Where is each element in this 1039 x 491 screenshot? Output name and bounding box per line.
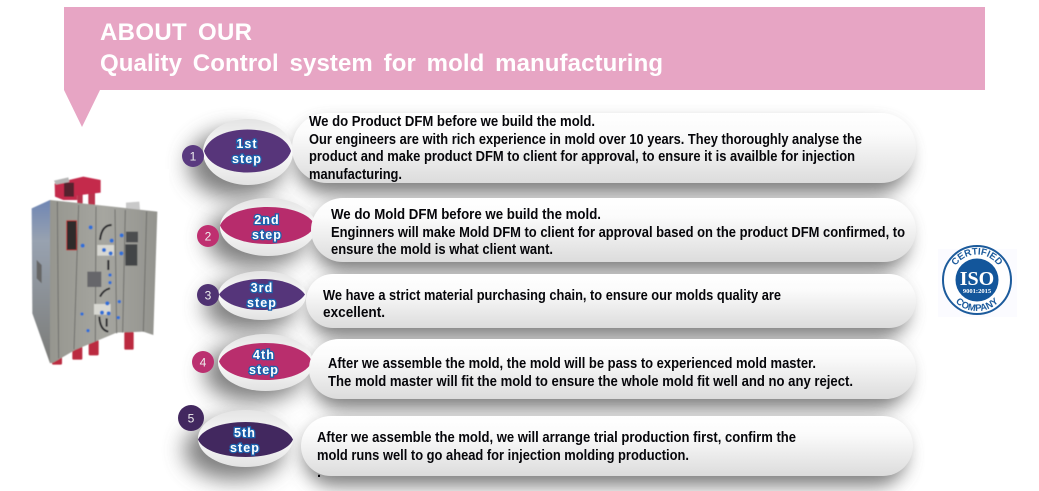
photo background xyxy=(0,169,169,369)
step label 5: 5th xyxy=(234,426,256,440)
number badge 2: 2 xyxy=(205,230,212,244)
title line 1: ABOUT OUR xyxy=(100,19,252,46)
text 4: After we assemble the mold, the mold will be pass to experienced mold master. xyxy=(328,356,816,372)
oval 1 xyxy=(204,129,291,173)
oval 2 xyxy=(220,207,315,244)
number badge 1: 1 xyxy=(190,150,197,164)
standard number: 9001:2015 xyxy=(963,288,992,295)
text 5: mold runs well to go ahead for injection molding production. xyxy=(317,448,689,464)
step label 2: 2nd xyxy=(254,213,280,227)
bowl 2 xyxy=(220,198,316,256)
step label 2: step xyxy=(252,228,282,242)
banner shape with pointer xyxy=(64,7,985,127)
number badge 1 xyxy=(182,145,204,167)
text 2 xyxy=(331,207,905,258)
number badge 4: 4 xyxy=(200,356,207,370)
text 3: We have a strict material purchasing chain, to ensure our molds quality are xyxy=(323,288,781,304)
step label 1: step xyxy=(232,152,262,166)
step label 3: 3rd xyxy=(251,281,273,295)
text 5 xyxy=(317,430,796,481)
number badge 5: 5 xyxy=(188,412,195,426)
text 3: excellent. xyxy=(323,305,385,321)
text 1: manufacturing. xyxy=(309,167,402,183)
header banner xyxy=(64,7,985,127)
oval 3 xyxy=(219,279,305,310)
text 1: We do Product DFM before we build the mold. xyxy=(309,114,595,130)
ISO label: ISO xyxy=(960,268,994,290)
certified arc text: CERTIFIED xyxy=(952,248,1002,264)
bowl 3 xyxy=(218,271,306,320)
step label 5: step xyxy=(230,441,260,455)
number badge 3: 3 xyxy=(205,288,212,302)
text 2: We do Mold DFM before we build the mold. xyxy=(331,207,601,223)
text 2: Enginners will make Mold DFM to client for approval based on the product DFM confirmed, to xyxy=(331,225,905,241)
badge background xyxy=(938,249,1017,317)
step label 1: 1st xyxy=(236,137,258,151)
number badge 3 xyxy=(197,284,219,306)
text 4: The mold master will fit the mold to ensure the whole mold fit well and no any reject. xyxy=(328,374,853,390)
step 1 xyxy=(182,113,916,185)
pill 1 xyxy=(292,113,916,183)
text 2: ensure the mold is what client want. xyxy=(331,242,553,258)
step 4 xyxy=(192,334,916,399)
step label 3: step xyxy=(247,296,277,310)
text 1: Our engineers are with rich experience in mold over 10 years. They thoroughly analyse the xyxy=(309,132,862,148)
text 5: . xyxy=(317,465,321,481)
oval 4 xyxy=(219,343,312,380)
pill 5 xyxy=(301,416,913,476)
mold illustration xyxy=(32,177,157,365)
pill 4 xyxy=(309,339,916,399)
number badge 4 xyxy=(192,351,214,373)
pill 3 xyxy=(306,274,916,328)
text 3 xyxy=(323,288,781,321)
bowl 4 xyxy=(218,334,313,391)
text 1: product and make product DFM to client for approval, to ensure it is availble for injection xyxy=(309,149,855,165)
step label 4: step xyxy=(249,363,279,377)
ISO certified badge xyxy=(942,245,1012,315)
bowl 5 xyxy=(198,410,293,467)
number badge 5 xyxy=(178,405,204,431)
step 5 xyxy=(178,405,913,481)
shadows behind steps xyxy=(184,124,908,486)
company arc text: COMPANY xyxy=(956,297,997,312)
step 2 xyxy=(197,198,916,262)
step label 4: 4th xyxy=(253,348,275,362)
text 1 xyxy=(309,114,862,183)
bowl 1 xyxy=(203,119,293,185)
inner disc xyxy=(956,258,998,302)
step 3 xyxy=(197,271,916,328)
pill 2 xyxy=(311,198,916,262)
oval 5 xyxy=(198,422,293,457)
outer ring xyxy=(943,246,1011,314)
mold photo xyxy=(0,169,169,369)
number badge 2 xyxy=(197,225,219,247)
text 5: After we assemble the mold, we will arrange trial production first, confirm the xyxy=(317,430,796,446)
title line 2: Quality Control system for mold manufacturing xyxy=(100,50,663,77)
text 4 xyxy=(328,356,853,390)
